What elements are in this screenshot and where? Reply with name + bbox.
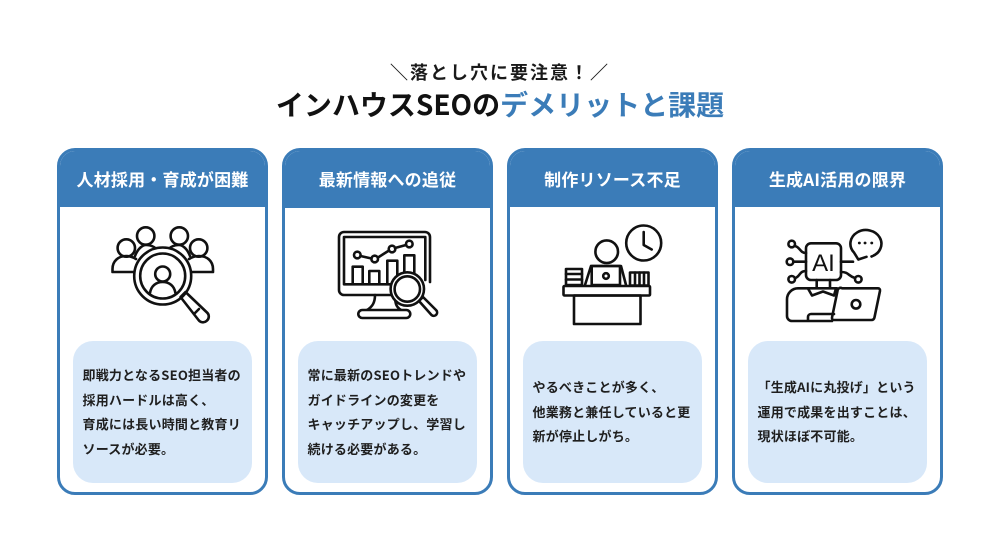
text block: talent hiring: ソースが必要。: [82, 439, 174, 458]
text block: lack of production resources: 新が停止しがち。: [532, 426, 638, 445]
text block: limits of generative AI: 「生成AIに丸投げ」という: [758, 377, 916, 396]
description box: lack of production resources: [523, 341, 702, 483]
panel: talent hiring: [57, 148, 268, 495]
text block: keeping up with news: 続ける必要がある。: [308, 439, 426, 458]
text block: limits of generative AI: 運用で成果を出すことは、: [758, 402, 916, 421]
text block: talent hiring: 採用ハードルは高く、: [82, 390, 215, 409]
panel: keeping up with news: [282, 148, 493, 495]
description box: talent hiring: [73, 341, 252, 483]
heading: keeping up with news: [282, 148, 493, 208]
text block: limits of generative AI: [758, 377, 916, 445]
text block: keeping up with news: ガイドラインの変更を: [308, 390, 440, 409]
heading: lack of production resources: [507, 148, 718, 207]
text block: keeping up with news: キャッチアップし、学習し: [308, 414, 466, 433]
text block: talent hiring: 育成には長い時間と教育リ: [82, 414, 241, 433]
heading: keeping up with news: 最新情報への追従: [319, 166, 456, 191]
heading: talent hiring: 人材採用・育成が困難: [76, 166, 248, 191]
description box: keeping up with news: [298, 341, 477, 483]
text block: keeping up with news: 常に最新のSEOトレンドや: [308, 365, 466, 384]
heading: lack of production resources: 制作リソース不足: [544, 166, 681, 191]
text block: talent hiring: 即戦力となるSEO担当者の: [82, 365, 241, 384]
subtitle: watch out for pitfalls: ＼落とし穴に要注意！／: [390, 59, 610, 85]
icon: AI robot with laptop: AI: [812, 250, 835, 277]
heading: talent hiring: [57, 148, 268, 207]
text block: lack of production resources: [532, 377, 691, 445]
panel: limits of generative AI: [732, 148, 943, 495]
description box: limits of generative AI: [748, 341, 927, 483]
panel: lack of production resources: [507, 148, 718, 495]
text block: lack of production resources: やるべきことが多く、: [532, 377, 665, 396]
text block: talent hiring: [82, 365, 241, 458]
text block: limits of generative AI: 現状ほぼ不可能。: [758, 426, 863, 445]
heading: limits of generative AI: 生成AI活用の限界: [769, 166, 906, 191]
title: インハウスSEOのデメリットと課題: [276, 84, 724, 124]
heading: limits of generative AI: [732, 148, 943, 207]
text block: lack of production resources: 他業務と兼任していると更: [532, 402, 691, 421]
text block: keeping up with news: [308, 365, 466, 458]
